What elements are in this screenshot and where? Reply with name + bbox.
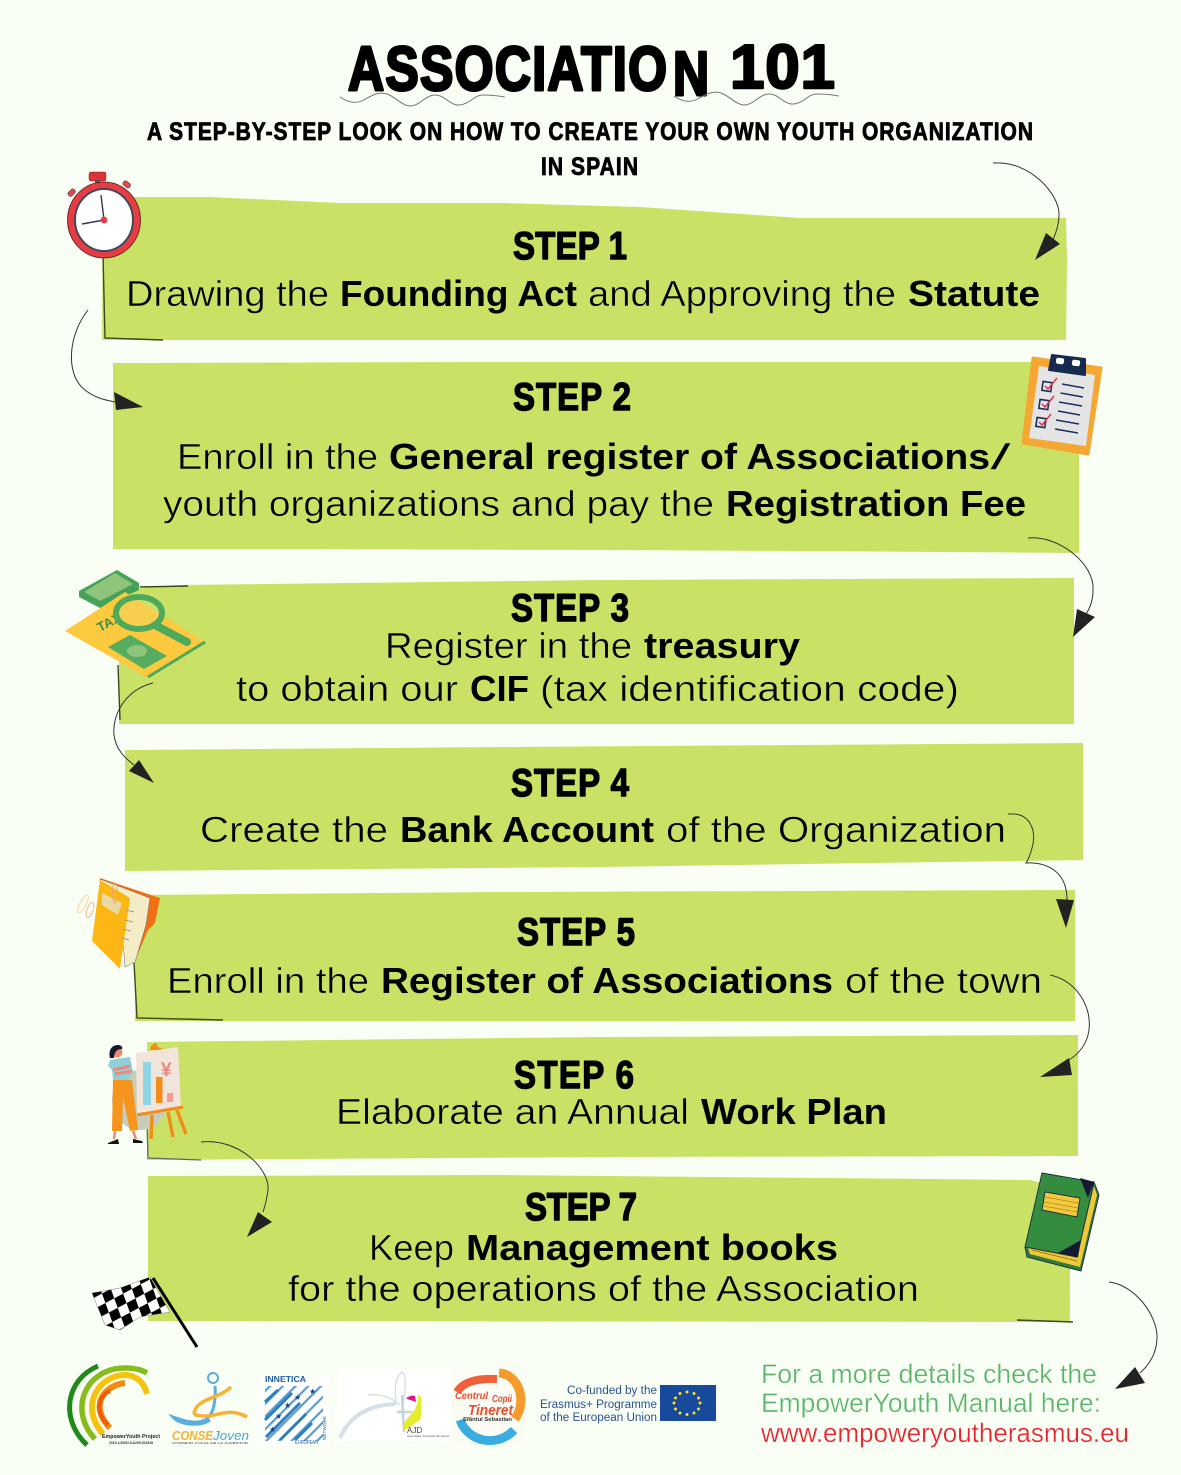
step 3 heading: STEP 3 — [511, 586, 629, 630]
logo: Innetica European Network: ★ — [269, 1425, 276, 1434]
step 4 text: Create the — [200, 809, 388, 850]
step 2 text: youth organizations and pay the — [163, 483, 714, 524]
arrow: step 4 to step 5 — [1008, 814, 1074, 928]
panel: step 2 — [113, 362, 1079, 553]
step 2 text: / — [990, 436, 1011, 477]
logo: Innetica European Network: ★ — [284, 1401, 291, 1410]
panel: step 3 — [118, 578, 1074, 724]
icon: woman presenting chart on easel: ¥ — [161, 1060, 172, 1081]
step 4 heading: STEP 4 — [511, 761, 629, 805]
step 4 text: of the Organization — [666, 809, 1006, 850]
panel: step 4 — [125, 743, 1083, 871]
step 6 text: Work Plan — [701, 1091, 887, 1132]
arrow: step 7 to manual link — [1109, 1282, 1157, 1389]
icon: checkered finish flag — [92, 1277, 197, 1347]
step 5 text: of the town — [845, 960, 1042, 1001]
callout: manual link — [760, 1359, 1129, 1448]
icon: clipboard checklist — [1023, 355, 1101, 454]
step 1 text: Statute — [908, 273, 1040, 314]
logo: Consejoven — [172, 1373, 249, 1445]
panel: step 5 — [134, 890, 1075, 1021]
callout: manual link: For a more details check the — [761, 1359, 1097, 1389]
step 3 text — [236, 625, 959, 709]
step 1 heading: STEP 1 — [513, 224, 627, 268]
arrow: step 2 to step 3 — [1028, 538, 1095, 637]
step 7 text — [288, 1227, 919, 1309]
logo: AJD: AJD — [407, 1426, 422, 1435]
logo: Centrul de Copii si Tineret: Tineret — [468, 1402, 514, 1419]
icon: folder with documents — [76, 878, 160, 969]
logo: Innetica European Network: ★ — [275, 1412, 282, 1421]
subtitle: A STEP-BY-STEP LOOK ON HOW TO CREATE YOUR OWN YOUTH ORGANIZATION — [147, 117, 1033, 145]
callout: manual link: www.empoweryoutherasmus.eu — [760, 1418, 1129, 1448]
step 3 text: to obtain our — [236, 668, 458, 709]
logo: Erasmus+ co-funding statement: Co-funded by the — [567, 1385, 657, 1397]
step 5 text: Enroll in the — [167, 960, 369, 1001]
logo: Innetica European Network — [258, 1374, 329, 1446]
tax label: TAX — [94, 609, 124, 635]
logo: Centrul de Copii si Tineret: Copii — [492, 1394, 512, 1405]
step 2 text: Registration Fee — [726, 483, 1026, 524]
arrow: step 6 to step 7 — [201, 1142, 272, 1237]
callout: manual link: EmpowerYouth Manual here: — [761, 1388, 1101, 1418]
step 1 text — [126, 273, 1040, 314]
step 5 text — [167, 960, 1042, 1001]
step 5 text: Register of Associations — [381, 960, 833, 1001]
logo: EmpowerYouth Project — [70, 1366, 160, 1445]
title underline: right wave — [674, 92, 839, 105]
step 4 text: Bank Account — [400, 809, 654, 850]
title: 101 — [730, 33, 835, 102]
step 1 text: and Approving the — [588, 273, 896, 314]
step 7 heading: STEP 7 — [525, 1185, 637, 1229]
logo: Innetica European Network: EUROPEAN — [295, 1440, 318, 1446]
icon: stopwatch — [67, 172, 140, 258]
logo: Innetica European Network: INNETICA — [265, 1374, 306, 1384]
arrow: step 5 to step 6 — [1040, 975, 1089, 1077]
logo: Erasmus+ co-funding statement: Erasmus+ Programme — [540, 1399, 657, 1411]
logo: Centrul de Copii si Tineret — [454, 1369, 525, 1443]
logo: AJD — [338, 1369, 450, 1441]
step 2 text: General register of Associations — [389, 436, 990, 477]
icon: tax document with magnifier and money — [65, 570, 205, 678]
step 3 text: (tax identification code) — [540, 668, 959, 709]
subtitle: IN SPAIN — [541, 152, 638, 180]
step 1 text: Drawing the — [126, 273, 329, 314]
step 5 heading: STEP 5 — [517, 910, 635, 954]
step 7 text: Keep — [369, 1227, 454, 1268]
step 1 text: Founding Act — [340, 273, 577, 314]
step 7 text: Management books — [466, 1227, 838, 1268]
logo: Innetica European Network: ★ — [309, 1387, 316, 1396]
logo: Consejoven: Joven — [212, 1428, 249, 1443]
title — [348, 33, 835, 108]
arrow: intro to step 1 — [993, 163, 1060, 260]
logo: Centrul de Copii si Tineret: Sfântul Sebastian — [463, 1417, 513, 1423]
title underline: left wave — [340, 93, 505, 106]
icon: woman presenting chart on easel — [108, 1043, 186, 1144]
title: N — [673, 39, 709, 108]
EU flag — [660, 1385, 716, 1421]
panel: step 7 — [148, 1175, 1073, 1322]
step 3 text: CIF — [470, 668, 529, 709]
step 4 text — [200, 809, 1006, 850]
icon: green book — [1025, 1173, 1099, 1271]
step 2 heading: STEP 2 — [513, 375, 631, 419]
arrow: step 3 to step 4 — [114, 683, 154, 783]
logo: AJD: Asociatia Juvenila de Deva — [407, 1435, 450, 1438]
logo caption: EmpowerYouth Project — [102, 1434, 160, 1440]
logo: EmpowerYouth Project: 2019-2-ES02-KA205-001628 — [109, 1441, 153, 1445]
logo: Erasmus+ co-funding statement: of the European Union — [540, 1412, 657, 1424]
panel: step 6 — [147, 1035, 1078, 1160]
step 6 text: Elaborate an Annual — [336, 1091, 689, 1132]
logo: Consejoven: CONSEJO LOCAL DE LA JUVENTUD — [172, 1442, 248, 1445]
panel: step 1 — [102, 197, 1067, 340]
step 3 text: treasury — [644, 625, 800, 666]
arrow: step 1 to step 2 — [71, 310, 143, 410]
step 2 text: Enroll in the — [177, 436, 378, 477]
subtitle — [147, 117, 1033, 180]
step 2 text — [163, 436, 1026, 524]
step 3 text: Register in the — [385, 625, 632, 666]
logo: Innetica European Network: NETWORK — [322, 1416, 327, 1440]
step 6 text — [336, 1091, 887, 1132]
logo: Consejoven: CONSE — [172, 1428, 213, 1443]
logo: Innetica European Network: ★ — [294, 1393, 301, 1402]
step 6 heading: STEP 6 — [514, 1053, 634, 1097]
logo: Centrul de Copii si Tineret: Centrul — [455, 1391, 488, 1402]
title: ASSOCIATIO — [348, 34, 667, 103]
step 7 text: for the operations of the Association — [288, 1268, 919, 1309]
logo: Erasmus+ co-funding statement — [540, 1385, 716, 1424]
